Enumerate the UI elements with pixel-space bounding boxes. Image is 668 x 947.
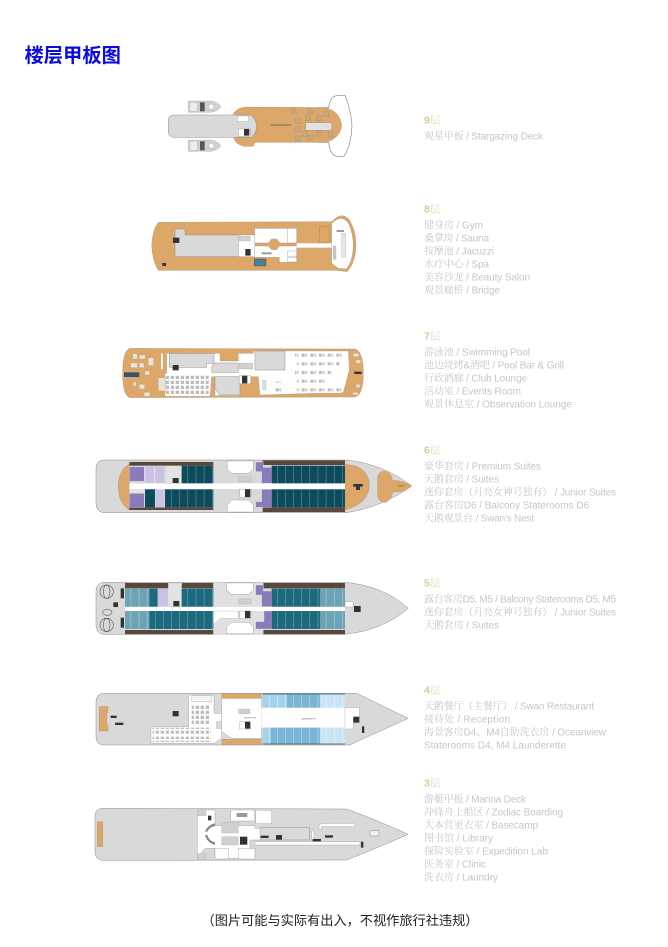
suites bbox=[256, 585, 272, 629]
text: 3F: 洗衣房 / Laundry bbox=[424, 870, 498, 884]
text: 5F bbox=[424, 578, 616, 632]
text: 3F: 大本营更衣室 / Basecamp bbox=[424, 818, 538, 832]
icon: port tender boat bbox=[188, 101, 221, 112]
hull bbox=[96, 693, 408, 745]
text: 5F: 天鹅套房 / Suites bbox=[424, 618, 499, 632]
text: 7F: 池边烧烤&酒吧 / Pool Bar & Grill bbox=[424, 358, 564, 372]
aft grey terrace bbox=[175, 229, 238, 257]
basecamp and library bbox=[197, 810, 260, 858]
text: 6F: 露台客房D6 / Balcony Staterooms D6 bbox=[424, 498, 589, 512]
text: 4F: 4层 bbox=[424, 684, 441, 696]
hull bbox=[96, 582, 408, 634]
caption: （图片可能与实际有出入，不视作旅行社违规） bbox=[202, 913, 478, 928]
bar counter bbox=[263, 380, 266, 390]
central corridor and lobby bbox=[129, 466, 345, 493]
stair bbox=[173, 238, 179, 243]
sun deck surface bbox=[152, 216, 356, 272]
corridor orange bottom bbox=[222, 739, 261, 745]
service room bbox=[319, 227, 329, 242]
text: 8F: 8层 bbox=[424, 204, 441, 216]
swan's nest label: SWAN'S bbox=[398, 485, 406, 488]
forward staterooms bbox=[272, 589, 345, 629]
launderette corridor: LAUNDERETTE bbox=[301, 717, 317, 720]
forward mast bbox=[354, 372, 362, 374]
text: 3F bbox=[424, 778, 563, 884]
text: 7F: 观景休息室 / Observation Lounge bbox=[424, 398, 572, 410]
reception: RECEPTION bbox=[244, 718, 256, 720]
text: 5F: 露台客房D5, M5 / Balcony Staterooms D5, M5 bbox=[424, 592, 616, 606]
text: 5F: 5层 bbox=[424, 578, 441, 590]
text: 7F bbox=[424, 330, 572, 410]
corridor to bridge bbox=[297, 243, 334, 248]
text: 7F: 7层 bbox=[424, 330, 441, 342]
laundry bbox=[215, 848, 255, 859]
forward stair bbox=[353, 484, 363, 487]
text: 6F: 迷你套房（月亮女神号独有） / Junior Suites bbox=[424, 486, 616, 498]
dark stores bbox=[208, 816, 363, 848]
swan's nest walkway bbox=[378, 471, 412, 503]
stargazing deck surface bbox=[233, 107, 342, 146]
forward store outline bbox=[260, 827, 309, 840]
suites: light purple bbox=[145, 466, 165, 507]
deck plan: 7F pool deck bbox=[123, 348, 363, 398]
text: 8F bbox=[424, 204, 530, 296]
deck surface bbox=[123, 348, 363, 398]
deck label bbox=[271, 124, 291, 126]
deck plan: 5F balcony staterooms bbox=[96, 582, 408, 634]
deck plan: 6F suites bbox=[96, 460, 412, 513]
club lounge tables bbox=[166, 376, 209, 396]
reception bbox=[222, 698, 262, 738]
text: 9F: 观星甲板 / Stargazing Deck bbox=[424, 130, 544, 142]
lift lobby bbox=[237, 116, 250, 136]
text: 8F: 观景廊桥 / Bridge bbox=[424, 284, 500, 296]
deck plan: 9F Stargazing Deck bbox=[168, 95, 352, 156]
text: 9F: 9层 bbox=[424, 114, 441, 126]
central corridor and lobby bbox=[125, 582, 345, 634]
lift lobby bbox=[238, 235, 255, 257]
balcony staterooms D6 aft bbox=[145, 466, 213, 507]
text: 4F: 接待处 / Reception bbox=[424, 712, 510, 726]
pool loungers bbox=[131, 353, 361, 396]
text: 8F: 水疗中心 / Spa bbox=[424, 258, 489, 270]
grey rooms bbox=[169, 351, 285, 395]
central skylight bbox=[306, 123, 332, 130]
text: 8F: 健身房 / Gym bbox=[424, 218, 483, 232]
lift lobbies bbox=[227, 461, 253, 512]
text: 3F: 医务室 / Clinic bbox=[424, 858, 486, 870]
lift lobbies bbox=[227, 583, 253, 634]
clinic bbox=[256, 810, 272, 824]
balcony staterooms D6 forward bbox=[272, 466, 345, 507]
text: 8F: 桑拿房 / Sauna bbox=[424, 232, 489, 244]
deck plan: 3F marina deck bbox=[95, 808, 408, 860]
oceanview staterooms bottom bbox=[263, 728, 345, 744]
text: 7F: 行政酒廊 / Club Lounge bbox=[424, 372, 527, 384]
text: 8F: 按摩池 / Jacuzzi bbox=[424, 244, 494, 258]
text: 3F: 图书馆 / Library bbox=[424, 832, 493, 844]
corner stores bbox=[198, 810, 206, 860]
corridor orange top bbox=[222, 693, 261, 698]
zodiac racks bbox=[100, 585, 113, 632]
balcony strips bbox=[125, 583, 345, 634]
loungers bbox=[291, 109, 333, 141]
text: 7F: 活动室 / Events Room bbox=[424, 384, 521, 398]
text: 3F: 3层 bbox=[424, 778, 441, 790]
text: 4F: 海景客房D4、M4自助洗衣房 / Oceanview bbox=[424, 726, 607, 738]
bridge wing outline bbox=[316, 95, 352, 156]
forward stair bbox=[345, 602, 353, 607]
text: 5F: 迷你套房（月亮女神号独有） / Junior Suites bbox=[424, 606, 616, 618]
hull bbox=[96, 460, 412, 513]
marina door bbox=[97, 822, 103, 847]
jacuzzi bbox=[254, 259, 266, 266]
forward terrace bbox=[345, 465, 369, 510]
deck plan: 8F wellness and bridge bbox=[152, 216, 356, 272]
balcony strips bbox=[129, 460, 345, 512]
text: 4F: Staterooms D4, M4 Launderette bbox=[424, 740, 566, 752]
aft staterooms bbox=[125, 589, 213, 629]
tender icon bbox=[370, 831, 379, 836]
oceanview staterooms top bbox=[263, 694, 345, 708]
text: 7F: 游泳池 / Swimming Pool bbox=[424, 346, 530, 358]
swan restaurant bbox=[151, 695, 222, 743]
text: 4F: 天鹅餐厅（主餐厅） / Swan Restaurant bbox=[424, 700, 594, 712]
marina platform bbox=[99, 707, 108, 731]
text: 4F bbox=[424, 684, 607, 752]
hull bbox=[95, 808, 408, 860]
text: 6F: 6层 bbox=[424, 444, 441, 456]
interior public area bbox=[165, 351, 349, 396]
deck plan: 4F restaurant and oceanview bbox=[96, 693, 408, 745]
aft terrace bbox=[118, 464, 129, 510]
observation lounge tables bbox=[273, 352, 345, 393]
aft grey deck bbox=[168, 115, 257, 137]
launderette corridor bbox=[262, 708, 364, 733]
bridge bbox=[332, 218, 353, 269]
text: 9F bbox=[424, 114, 544, 142]
junior suite bbox=[158, 589, 168, 607]
text: 3F: 冲锋舟上船区 / Zodiac Boarding bbox=[424, 806, 563, 818]
text: 6F: 天鹅套房 / Suites bbox=[424, 472, 499, 486]
text: 6F: 天鹅观景台 / Swan's Nest bbox=[424, 512, 534, 524]
premium suites: purple bbox=[129, 462, 272, 507]
text: 3F: 游艇甲板 / Marina Deck bbox=[424, 792, 527, 806]
sauna and spa rooms bbox=[255, 228, 297, 262]
pool bbox=[124, 372, 139, 377]
gym bbox=[255, 228, 297, 243]
text: 3F: 探险实验室 / Expedition Lab bbox=[424, 844, 548, 858]
forward corridors bbox=[255, 823, 360, 845]
expedition lab bbox=[231, 810, 255, 821]
title: 楼层甲板图 bbox=[24, 45, 121, 67]
text: 6F: 豪华套房 / Premium Suites bbox=[424, 460, 541, 472]
text: 6F bbox=[424, 444, 616, 524]
text: 8F: 美容沙龙 / Beauty Salon bbox=[424, 270, 530, 284]
lift bbox=[173, 363, 253, 384]
icon: starboard tender boat bbox=[188, 140, 221, 151]
